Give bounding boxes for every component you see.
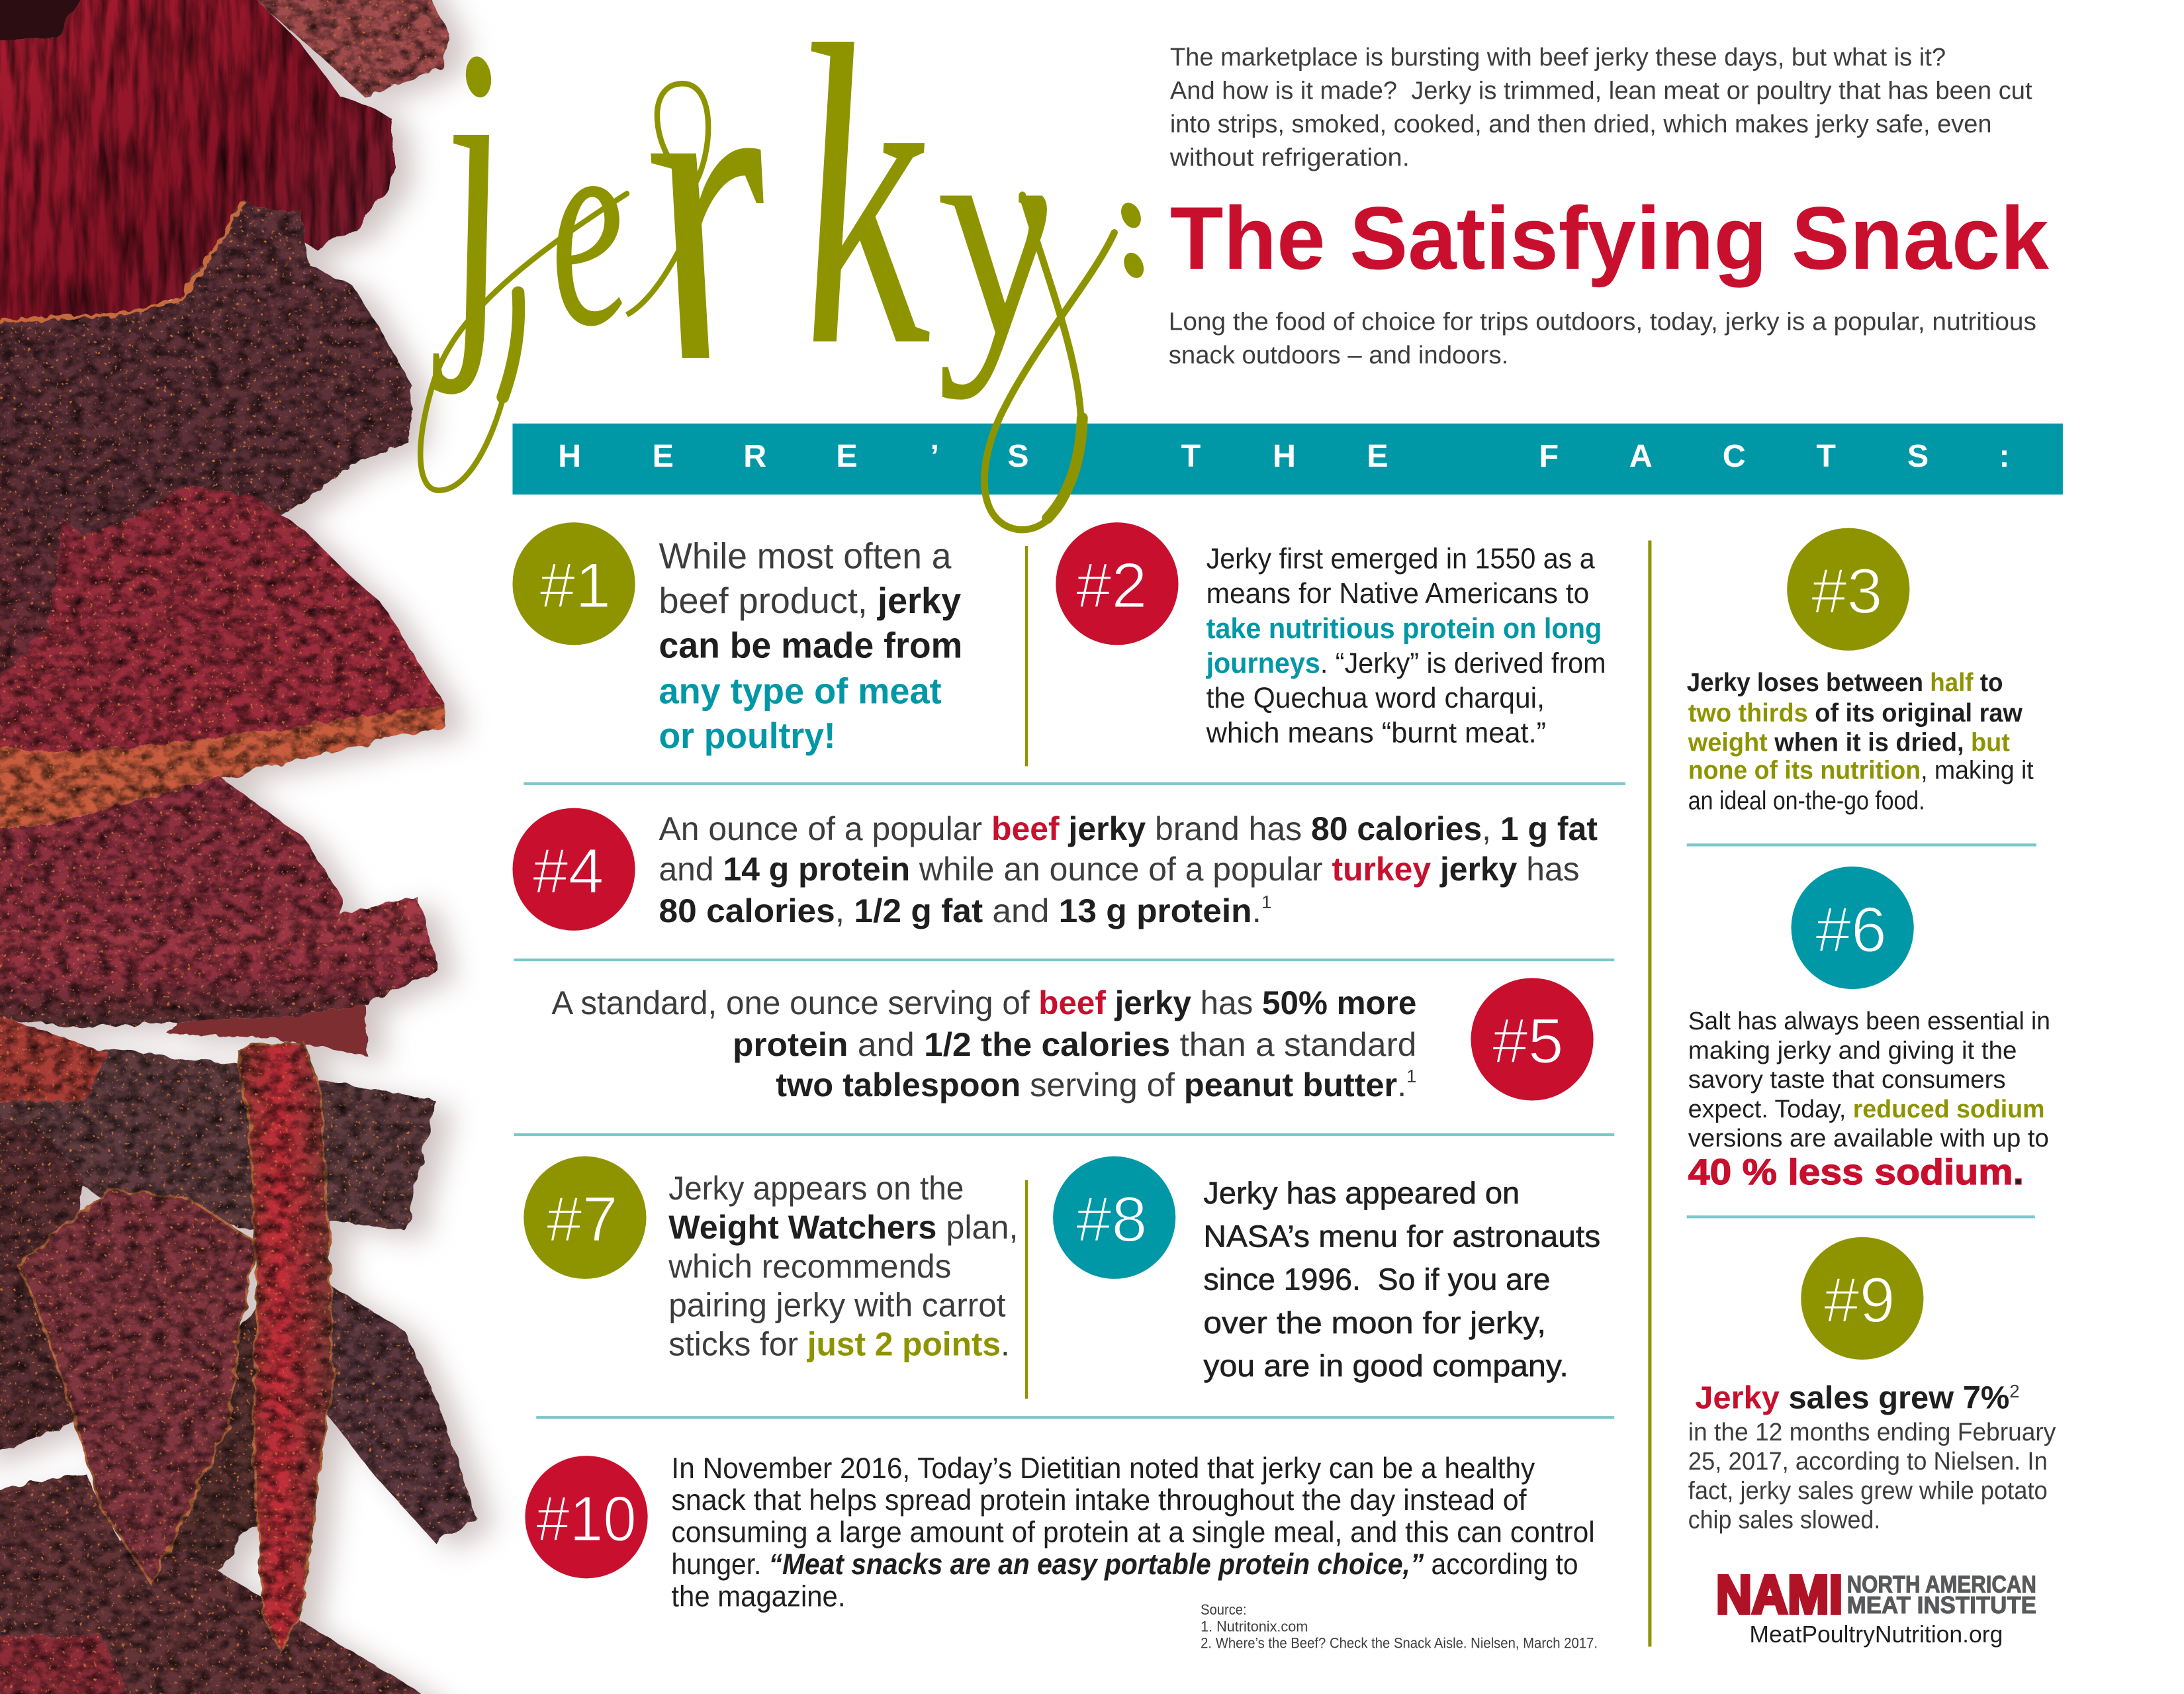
fact 2 text [1206, 543, 1606, 749]
fact 9 text: Jerky sales grew 7% [1695, 1380, 2007, 1416]
fact 2 text: take nutritious protein on long [1206, 613, 1602, 645]
title: jerky script word: : [1093, 137, 1169, 310]
badge #7 [523, 1156, 647, 1279]
subhead paragraph: snack outdoors – and indoors. [1169, 342, 1508, 369]
logo mark NAMI: NAMI [1716, 1565, 1843, 1625]
fact 10 text: consuming a large amount of protein at a single meal, and this can control [671, 1517, 1595, 1549]
badge #1: #1 [539, 549, 611, 622]
fact 9 text [1688, 1380, 2056, 1534]
badge #8 [1053, 1156, 1175, 1279]
meat: deep red sheet [0, 0, 396, 342]
badge #2: #2 [1076, 549, 1147, 622]
fact 1 text: While most often a [659, 536, 952, 577]
flourish: e to r link [627, 201, 701, 315]
meat: vertical red stick [237, 1042, 333, 1651]
meat: center back dark [160, 1282, 271, 1591]
fact 6 text: expect. Today, reduced sodium [1688, 1096, 2045, 1123]
fact 6 text [1688, 1008, 2050, 1192]
meat: center brown-red piece [18, 1190, 256, 1584]
panel: fact 7 [523, 1156, 1018, 1363]
badge #7: #7 [547, 1183, 618, 1255]
logo wordmark: MEAT INSTITUTE [1847, 1592, 2036, 1619]
fact 3 text: weight when it is dried, but [1688, 728, 2010, 757]
meat: bottom-left red piece [0, 1636, 139, 1694]
fact 7 text: sticks for just 2 points. [668, 1325, 1010, 1363]
fact 8 text: Jerky has appeared on [1203, 1176, 1520, 1210]
title: jerky script word: y [891, 66, 1077, 400]
fact 1 text: can be made from [659, 624, 962, 665]
meat: dark stick [0, 1045, 436, 1231]
subhead paragraph: Long the food of choice for trips outdoors, today, jerky is a popular, nutritious [1169, 308, 2036, 336]
meat: left column dark [0, 1107, 83, 1460]
meat: stick lower dark edge [167, 1000, 368, 1056]
fact 5 text: protein and 1/2 the calories than a standard [733, 1025, 1416, 1063]
meat: top-left dark gap [0, 0, 101, 97]
flourish: y swash [984, 195, 1115, 530]
fact 8 text: you are in good company. [1203, 1348, 1569, 1383]
fact 1 text: or poultry! [659, 715, 836, 756]
meat: upper horizontal stick [0, 897, 439, 1027]
fact 1 text: beef product, jerky [659, 580, 962, 621]
flourish: r loop [657, 83, 708, 184]
subhead paragraph [1169, 308, 2036, 369]
intro paragraph: The marketplace is bursting with beef jerky these days, but what is it? [1170, 44, 1946, 71]
fact 5 text [551, 984, 1416, 1104]
badge #9: #9 [1824, 1264, 1895, 1336]
fact 1 text [659, 536, 962, 756]
panel: fact 10 [525, 1452, 1595, 1613]
fact 10 text: hunger. “Meat snacks are an easy portable protein choice,” according to [671, 1548, 1578, 1581]
meat: orange fat lines [0, 201, 244, 323]
intro paragraph: without refrigeration. [1169, 144, 1410, 171]
fact 6 text: making jerky and giving it the [1688, 1037, 2017, 1064]
source notes: 2. Where’s the Beef? Check the Snack Aisle. Nielsen, March 2017. [1201, 1635, 1598, 1652]
logo wordmark: NORTH AMERICAN [1847, 1571, 2036, 1597]
fact 7 text: Weight Watchers plan, [668, 1208, 1018, 1246]
fact 10 text: In November 2016, Today’s Dietitian noted that jerky can be a healthy [671, 1452, 1535, 1485]
fact 10 text [671, 1452, 1595, 1613]
heading: the satisfying snack: The Satisfying Snack [1170, 188, 2050, 288]
source notes: 1. Nutritonix.com [1201, 1618, 1308, 1634]
flourish: j swash [420, 194, 627, 491]
fact 5 text: two tablespoon serving of peanut butter. [776, 1066, 1406, 1104]
badge #10 [525, 1456, 648, 1578]
fact 9 text: 25, 2017, according to Nielsen. In [1688, 1448, 2048, 1476]
banner: here's the facts [512, 424, 2063, 494]
fact 5 text: 1 [1406, 1066, 1416, 1086]
meat: orange lower layer of the slice [0, 704, 445, 839]
meat: bottom pieces [0, 1472, 460, 1694]
dividers [514, 541, 2036, 1646]
fact 4 text: An ounce of a popular beef jerky brand has 80 calories, 1 g fat [659, 810, 1598, 847]
panel: fact 4 [512, 808, 1598, 931]
badge #3 [1787, 528, 1909, 651]
meat: lean red triangular slice [0, 488, 444, 826]
badge #5 [1471, 978, 1594, 1101]
fact 6 text: savory taste that consumers [1688, 1066, 2006, 1094]
fact 6 text: Salt has always been essential in [1688, 1008, 2050, 1035]
fact 3 text: Jerky loses between half to [1687, 669, 2003, 697]
intro paragraph [1169, 44, 2032, 171]
fact 6 text: versions are available with up to [1688, 1125, 2049, 1153]
panel: fact 1 [512, 522, 962, 756]
fact 2 text: means for Native Americans to [1206, 578, 1589, 610]
fact 2 text: the Quechua word charqui, [1206, 682, 1545, 714]
fact 3 text [1687, 669, 2034, 816]
fact 3 text: none of its nutrition, making it [1688, 756, 2034, 784]
badge #2 [1056, 522, 1178, 645]
fact 9 text: chip sales slowed. [1688, 1507, 1880, 1534]
fact 10 text: snack that helps spread protein intake throughout the day instead of [671, 1484, 1527, 1517]
panel: fact 6 [1688, 867, 2050, 1192]
badge #6: #6 [1815, 893, 1887, 965]
fact 8 text: since 1996. So if you are [1203, 1262, 1550, 1297]
fact 5 text: A standard, one ounce serving of beef jerky has 50% more [551, 984, 1416, 1021]
badge #5: #5 [1492, 1005, 1564, 1077]
fact 1 text: any type of meat [659, 671, 942, 712]
fact 4 text: 1 [1261, 892, 1271, 912]
logo wordmark [1847, 1571, 2036, 1619]
fact 4 text: 80 calories, 1/2 g fat and 13 g protein. [659, 892, 1261, 929]
fact 7 text: which recommends [668, 1247, 951, 1285]
panel: fact 2 [1056, 522, 1606, 749]
logo: North American Meat Institute [1716, 1565, 2036, 1648]
badge #3: #3 [1811, 555, 1883, 627]
fact 2 text: Jerky first emerged in 1550 as a [1206, 543, 1595, 575]
intro paragraph: into strips, smoked, cooked, and then dried, which makes jerky safe, even [1170, 111, 1992, 138]
badge #6 [1792, 867, 1914, 989]
fact 4 text [659, 810, 1598, 929]
fact 6 text: 40 % less sodium . [1688, 1151, 2024, 1192]
fact 7 text [668, 1169, 1018, 1363]
badge #4 [512, 808, 635, 931]
title: jerky script word: e [530, 64, 641, 387]
fact 10 text: the magazine. [671, 1580, 845, 1613]
fact 9 text: 2 [2009, 1381, 2020, 1401]
meat: small left red piece [0, 1006, 109, 1104]
badge #1 [512, 522, 635, 645]
meat: right dark piece [320, 1279, 477, 1544]
meat: dark brown wrinkled piece [0, 201, 414, 724]
banner: here's the facts: HERE’S THE FACTS: [558, 438, 2010, 474]
meat: top-right mottled strip [223, 0, 450, 97]
fact 7 text: Jerky appears on the [668, 1169, 964, 1207]
fact 7 text: pairing jerky with carrot [668, 1286, 1006, 1324]
website: MeatPoultryNutrition.org [1749, 1621, 2003, 1648]
badge #4: #4 [533, 835, 604, 907]
intro paragraph: And how is it made? Jerky is trimmed, lean meat or poultry that has been cut [1170, 77, 2032, 105]
badge #8: #8 [1076, 1183, 1147, 1255]
panel: fact 5 [551, 978, 1594, 1104]
fact 9 text: fact, jerky sales grew while potato [1688, 1477, 2048, 1505]
fact 9 text: in the 12 months ending February [1688, 1419, 2056, 1446]
fact 4 text: and 14 g protein while an ounce of a popular turkey jerky has [659, 850, 1580, 888]
fact 3 text: an ideal on-the-go food. [1688, 787, 1925, 816]
meat: back red pieces [0, 777, 344, 947]
panel: fact 9 [1688, 1237, 2056, 1534]
fact 8 text: NASA’s menu for astronauts [1203, 1219, 1600, 1253]
fact 8 text [1203, 1176, 1600, 1383]
panel: fact 3 [1687, 528, 2034, 816]
photo: pile of beef jerky [0, 0, 477, 1694]
badge #10: #10 [536, 1483, 637, 1555]
fact 2 text: which means “burnt meat.” [1206, 718, 1546, 749]
source notes: Source: [1201, 1601, 1247, 1618]
fact 3 text: two thirds of its original raw [1688, 699, 2023, 728]
fact 2 text: journeys. “Jerky” is derived from [1206, 647, 1606, 679]
fact 8 text: over the moon for jerky, [1203, 1305, 1546, 1340]
badge #9 [1801, 1237, 1923, 1360]
panel: fact 8 [1053, 1156, 1600, 1383]
source notes [1201, 1601, 1598, 1652]
title: jerky script word [396, 0, 1169, 530]
